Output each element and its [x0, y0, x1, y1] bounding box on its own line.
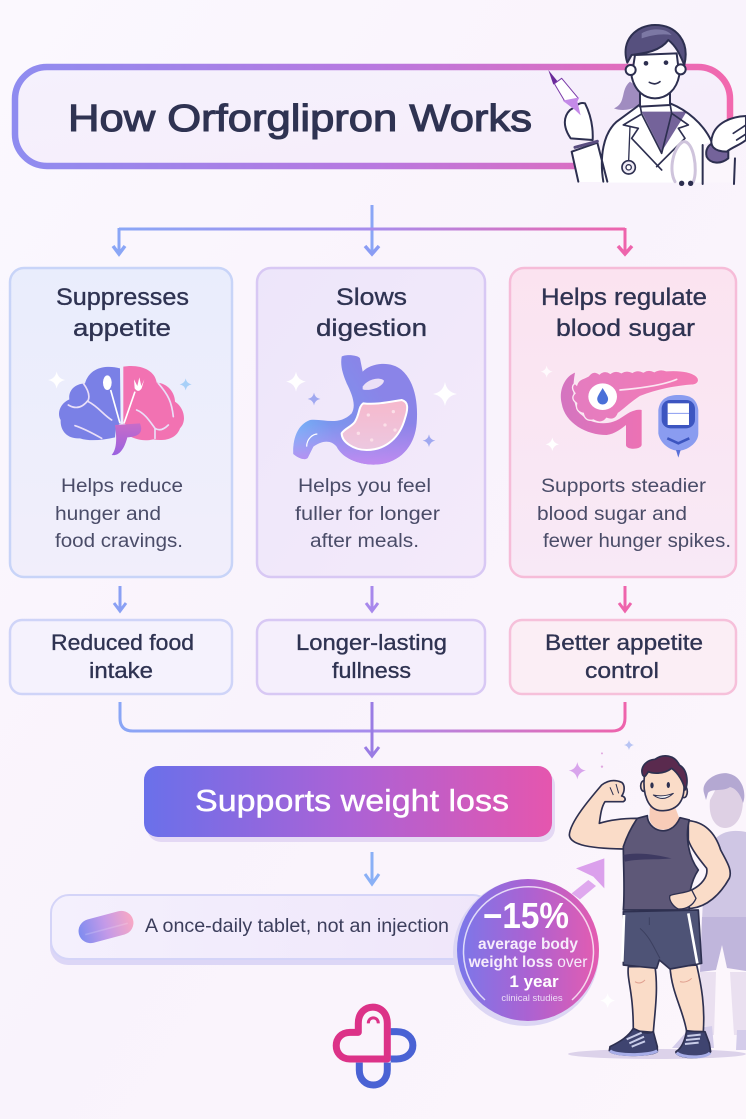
text block: food cravings. — [55, 531, 183, 552]
illustration: doctor with syringe — [548, 25, 746, 186]
panel: slows digestion — [257, 268, 485, 577]
panel: helps regulate blood sugar — [510, 268, 736, 577]
arrow: upward trend — [572, 858, 604, 899]
outcome: longer-lasting fullness: fullness — [332, 658, 411, 683]
floor shadow — [568, 1049, 746, 1059]
text block: fewer hunger spikes. — [543, 531, 731, 552]
text block: Helps you feel — [298, 476, 431, 497]
heading: digestion — [316, 315, 427, 342]
heading: appetite — [73, 315, 171, 342]
logo: heart and cross — [336, 1007, 413, 1085]
result button: supports weight loss: Supports weight loss — [195, 783, 509, 818]
text block: hunger and — [55, 504, 161, 525]
illustration: flexing man — [569, 756, 730, 1058]
text block — [537, 476, 731, 552]
text block: Helps reduce — [61, 476, 183, 497]
arrows: panels to outcomes — [114, 586, 631, 611]
badge: minus 15 percent: clinical studies — [501, 993, 563, 1004]
illustration: ghost figure behind — [672, 773, 746, 1050]
title: How Orforglipron Works — [68, 98, 532, 140]
outcome: better appetite control — [510, 620, 736, 694]
badge: minus 15 percent — [453, 879, 599, 1026]
note: once-daily tablet: A once-daily tablet, not an injection — [145, 916, 449, 937]
heading: Suppresses — [56, 284, 189, 311]
text block — [55, 476, 183, 552]
badge: minus 15 percent: −15% — [483, 895, 569, 936]
text block — [295, 476, 441, 552]
badge: minus 15 percent: average body — [478, 936, 578, 953]
decorative sparkles — [569, 740, 634, 1008]
badge: minus 15 percent: 1 year — [509, 972, 559, 991]
text block: blood sugar and — [537, 504, 687, 525]
heading — [541, 284, 707, 342]
icon: tablet — [76, 908, 136, 946]
result button: supports weight loss — [144, 766, 555, 842]
text block: Supports steadier — [541, 476, 707, 497]
outcome: longer-lasting fullness: Longer-lasting — [296, 630, 447, 655]
icon: stomach — [286, 355, 457, 465]
text block: fuller for longer — [295, 504, 441, 525]
heading: blood sugar — [556, 315, 695, 342]
outcome: better appetite control: Better appetite — [545, 630, 703, 655]
panel: suppresses appetite — [10, 268, 232, 577]
syringe — [548, 70, 581, 115]
heading — [316, 284, 427, 342]
outcome: reduced food intake: Reduced food — [51, 630, 194, 655]
icon: pancreas and glucose meter — [541, 366, 699, 458]
badge: minus 15 percent: weight loss over — [468, 954, 587, 971]
icon: brain with cutlery — [48, 366, 192, 455]
outcome: better appetite control: control — [585, 658, 659, 683]
text block: after meals. — [310, 531, 419, 552]
arrow: result to tablet note — [365, 852, 379, 884]
heading: Helps regulate — [541, 284, 707, 311]
arrows: outcomes merge — [120, 702, 625, 756]
outcome: reduced food intake: intake — [89, 658, 153, 683]
outcome: longer-lasting fullness — [257, 620, 485, 694]
outcome: reduced food intake — [10, 620, 232, 694]
arrows: top split — [113, 205, 632, 254]
heading — [56, 284, 189, 342]
heading: Slows — [336, 284, 407, 311]
title banner — [15, 67, 730, 166]
note: once-daily tablet — [50, 895, 491, 965]
